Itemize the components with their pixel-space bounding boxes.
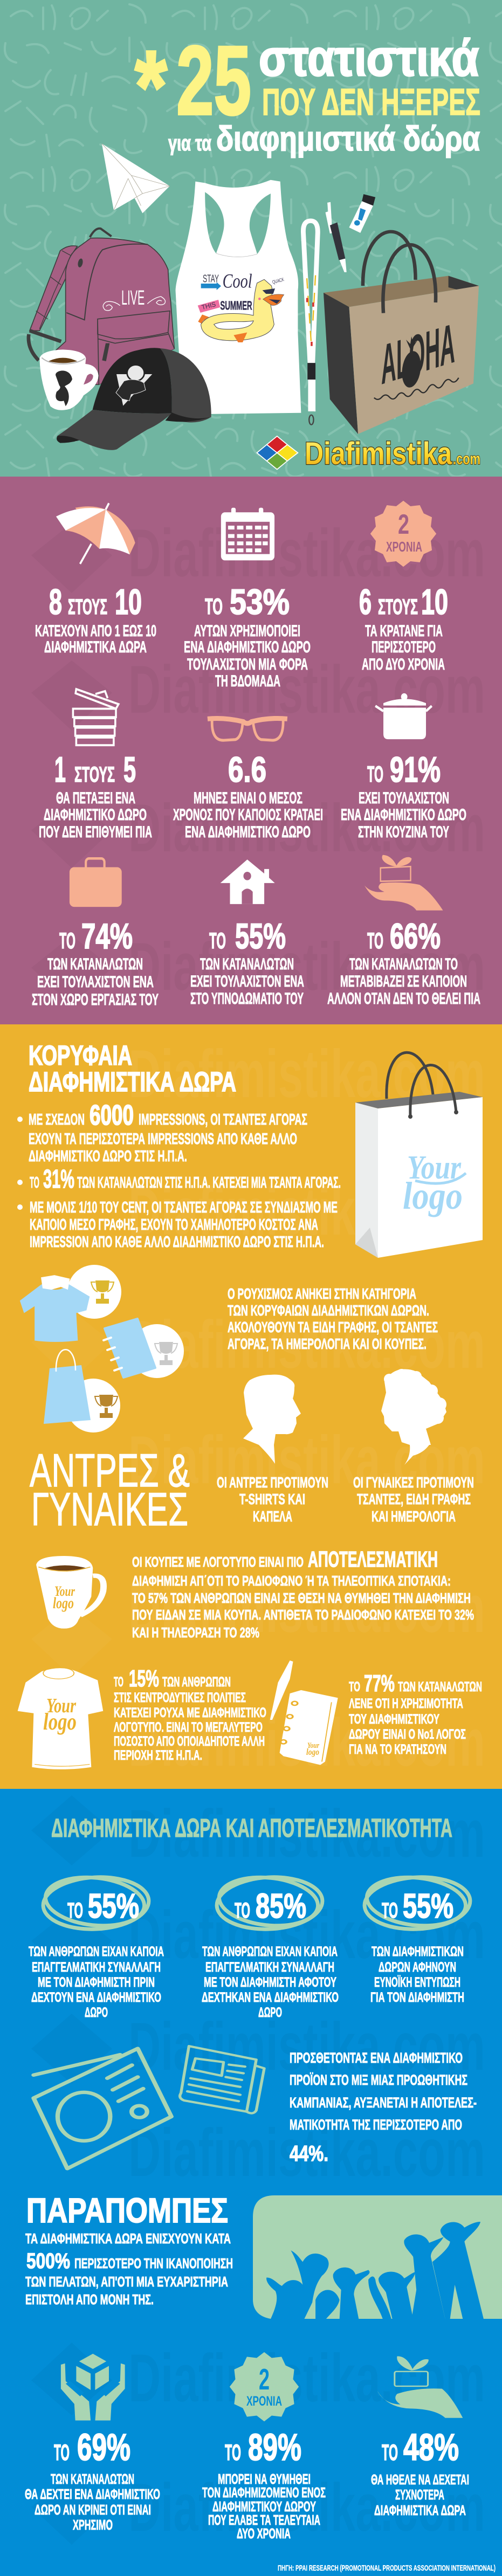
stat: 8 of 10: 8: [49, 582, 62, 622]
stat: 48 percent: 48%: [403, 2426, 459, 2468]
stat: 66 percent: [327, 916, 480, 1008]
text: 77 percent: ΤΟ: [349, 1679, 360, 1695]
stat: 8 of 10: ΣΤΟΥΣ: [68, 595, 107, 619]
icon: duck print on tank top: Cool: [223, 270, 252, 292]
icon: white mug with logo: logo: [53, 1594, 74, 1612]
stat: 55 percent before: ΤΟ: [67, 1899, 83, 1923]
text: 15 percent: ΠΕΡΙΟΧΗ ΣΤΙΣ Η.Π.Α.: [114, 1748, 202, 1763]
stat: 85 percent after: ΜΕ ΤΟΝ ΔΙΑΦΗΜΙΣΤΗ ΑΦΟΤΟΥ: [204, 1975, 336, 1990]
stat: 55 percent: [190, 916, 304, 1008]
stat: 8 of 10: 10: [115, 582, 142, 622]
text: 77 percent: [349, 1670, 482, 1757]
stat: 55 percent: ΤΟ: [209, 928, 226, 953]
title: για τα: [168, 132, 211, 155]
stat: 85 percent after: ΔΕΧΤΗΚΑΝ ΕΝΑ ΔΙΑΦΗΜΙΣΤΙΚΟ: [202, 1990, 339, 2005]
icon: coffee mug: [39, 349, 99, 410]
stat: 1 of 5: ΘΑ ΠΕΤΑΞΕΙ ΕΝΑ: [56, 789, 135, 807]
stat: 53 percent: ΤΗ ΒΔΟΜΑΔΑ: [215, 672, 280, 690]
stat: 69 percent: ΤΩΝ ΚΑΤΑΝΑΛΩΤΩΝ: [51, 2471, 134, 2487]
stat: 85 percent after: ΕΠΑΓΓΕΛΜΑΤΙΚΗ ΣΥΝΑΛΛΑΓΗ: [205, 1960, 334, 1975]
heading: men and women: ΓΥΝΑΙΚΕΣ: [31, 1484, 188, 1535]
stat: 74 percent: ΤΟ: [59, 928, 75, 953]
text: 15 percent: 15%: [129, 1665, 159, 1692]
stat: 89 percent: ΤΟΝ ΔΙΑΦΗΜΙΖΟΜΕΝΟ ΕΝΟΣ: [202, 2484, 326, 2501]
text: referrals paragraph: [25, 2230, 233, 2308]
icon: hand with gift: [377, 2356, 463, 2418]
stat: 53 percent: [184, 582, 311, 690]
text: bullet list: ΕΧΟΥΝ ΤΑ ΠΕΡΙΣΣΟΤΕΡΑ IMPRESSIONS ΑΠΟ ΚΑΘΕ ΑΛΛΟ: [29, 1131, 297, 1148]
stat: 55 percent: ΕΧΕΙ ΤΟΥΛΑΧΙΣΤΟΝ ΕΝΑ: [190, 973, 304, 990]
stat: 6.6 months: ΜΗΝΕΣ ΕΙΝΑΙ Ο ΜΕΣΟΣ: [194, 789, 302, 807]
text: clothing category: [228, 1285, 438, 1352]
icon: duck print on tank top: STAY: [203, 272, 219, 285]
icon: shirt with gold trophy: [20, 1265, 121, 1342]
stat: 6.6 months: [173, 749, 323, 841]
icon: 2 years badge: [230, 2352, 299, 2421]
stat: 85 percent after: 85%: [256, 1886, 306, 1925]
text: referrals paragraph: ΤΑ ΔΙΑΦΗΜΙΣΤΙΚΑ ΔΩΡΑ ΕΝΙΣΧΥΟΥΝ ΚΑΤΑ: [25, 2230, 231, 2247]
stat: 53 percent: ΤΟ: [205, 594, 223, 619]
stat: 85 percent after: ΔΩΡΟ: [258, 2005, 282, 2020]
title: 25: [176, 25, 251, 135]
text: men prefer: T-SHIRTS ΚΑΙ: [239, 1491, 305, 1507]
heading: top promotional gifts: ΚΟΡΥΦΑΙΑ: [29, 1040, 132, 1071]
stat: 55 percent before: 55%: [88, 1886, 139, 1925]
text: 15 percent: [114, 1665, 266, 1763]
stat: 6 of 10: ΣΤΟΥΣ: [378, 595, 418, 619]
stat: 55 percent before: ΜΕ ΤΟΝ ΔΙΑΦΗΜΙΣΤΗ ΠΡΙΝ: [38, 1975, 155, 1990]
stat: 6.6 months: 6.6: [228, 749, 266, 789]
icon: duck print on tank top: SUMMER: [220, 298, 252, 312]
stat: 1 of 5: 5: [123, 749, 136, 789]
icon: calendar: [221, 508, 274, 560]
icon: pen and notebook: logo: [306, 1747, 319, 1757]
logo: Diafimistika.com: Diafimistika: [305, 436, 452, 471]
icon: white shopping bag with your logo: Your: [407, 1149, 462, 1186]
text: referrals paragraph: ΕΠΙΣΤΟΛΗ ΑΠΟ ΜΟΝΗ ΤΗΣ.: [25, 2291, 154, 2308]
icon: paper plane: [102, 143, 170, 213]
text: women prefer: [353, 1474, 474, 1525]
stat: 69 percent: ΘΑ ΔΕΧΤΕΙ ΕΝΑ ΔΙΑΦΗΜΙΣΤΙΚΟ: [25, 2486, 160, 2502]
stat: 74 percent: ΣΤΟΝ ΧΩΡΟ ΕΡΓΑΣΙΑΣ ΤΟΥ: [32, 991, 159, 1009]
stat: 48 percent: ΣΥΧΝΟΤΕΡΑ: [395, 2487, 444, 2503]
stat: 1 of 5: ΣΤΟΥΣ: [74, 763, 115, 787]
icon: house: [221, 859, 275, 904]
icon: duck print on tank top: [198, 270, 285, 342]
stat: 6 of 10: ΤΑ ΚΡΑΤΑΝΕ ΓΙΑ: [365, 622, 443, 640]
stat: 69 percent: [25, 2426, 160, 2533]
icon: racerback tank top: [176, 180, 301, 415]
stat: 53 percent: ΤΟΥΛΑΧΙΣΤΟΝ ΜΙΑ ΦΟΡΑ: [187, 656, 308, 673]
stat: 74 percent: ΤΩΝ ΚΑΤΑΝΑΛΩΤΩΝ: [47, 955, 143, 973]
stat: 55 percent before: ΔΕΧΤΟΥΝ ΕΝΑ ΔΙΑΦΗΜΙΣΤΙΚΟ: [31, 1990, 161, 2005]
stat: 55 percent impression: ΤΟ: [382, 1899, 398, 1923]
text: bullet list: ΤΟ: [30, 1174, 39, 1191]
text: men prefer: [217, 1474, 328, 1525]
stat: 6.6 months: ΕΝΑ ΔΙΑΦΗΜΙΣΤΙΚΟ ΔΩΡΟ: [185, 823, 311, 841]
panel: hero header: [0, 0, 502, 477]
icon: stacked bin: [73, 689, 119, 745]
stat: 53 percent: 53%: [230, 582, 290, 622]
stat: 8 of 10: [35, 582, 156, 656]
heading: men and women: ΑΝΤΡΕΣ &: [30, 1445, 190, 1497]
stat: 55 percent: ΤΩΝ ΚΑΤΑΝΑΛΩΤΩΝ: [200, 955, 294, 973]
stat: 89 percent: ΠΟΥ ΕΛΑΒΕ ΤΑ ΤΕΛΕΥΤΑΙΑ: [208, 2512, 320, 2528]
stat: 69 percent: ΧΡΗΣΙΜΟ: [73, 2517, 113, 2533]
heading: referrals: ΠΑΡΑΠΟΜΠΕΣ: [26, 2191, 228, 2230]
icon: 2 years badge: ΧΡΟΝΙΑ: [246, 2394, 282, 2409]
stat: 6 of 10: [359, 582, 448, 673]
stat: 85 percent after: ΤΟ: [235, 1899, 250, 1923]
stat: 6 of 10: ΑΠΟ ΔΥΟ ΧΡΟΝΙΑ: [362, 656, 445, 673]
icon: lanyard: [303, 221, 318, 425]
stat: 91 percent: 91%: [390, 749, 441, 789]
stat: 91 percent: ΤΟ: [367, 761, 383, 787]
stat: 89 percent: ΤΟ: [225, 2440, 241, 2465]
text: adding a promotional product: 44%.: [290, 2141, 328, 2166]
heading: top promotional gifts: ΔΙΑΦΗΜΙΣΤΙΚΑ ΔΩΡΑ: [29, 1066, 236, 1097]
icon: umbrella: [56, 503, 135, 564]
icon: female silhouette: [381, 1369, 446, 1465]
stat: 74 percent: [32, 916, 159, 1009]
stat: 55 percent before: ΤΩΝ ΑΝΘΡΩΠΩΝ ΕΙΧΑΝ ΚΑΠΟΙΑ: [29, 1944, 164, 1959]
text: 15 percent: ΠΟΣΟΣΤΟ ΑΠΟ ΟΠΟΙΑΔΗΠΟΤΕ ΑΛΛΗ: [114, 1734, 265, 1749]
stat: 91 percent: [341, 749, 466, 841]
icon: cooking pot: [375, 693, 432, 739]
text: 15 percent: ΤΟ: [114, 1675, 123, 1690]
stat: 6.6 months: ΧΡΟΝΟΣ ΠΟΥ ΚΑΠΟΙΟΣ ΚΡΑΤΑΕΙ: [173, 806, 323, 824]
panel: blue effectiveness and referrals: [0, 1789, 502, 2576]
stat: 1 of 5: 1: [54, 749, 66, 789]
text: adding a promotional product: [290, 2050, 477, 2166]
stat: 55 percent before: ΔΩΡΟ: [85, 2005, 108, 2020]
text: mugs effectiveness: ΚΑΙ Η ΤΗΛΕΟΡΑΣΗ ΤΟ 28%: [132, 1624, 259, 1641]
stat: 69 percent: ΔΩΡΟ ΑΝ ΚΡΙΝΕΙ ΟΤΙ ΕΙΝΑΙ: [35, 2502, 151, 2518]
icon: male silhouette: [243, 1375, 301, 1464]
icon: 2 years badge: ΧΡΟΝΙΑ: [386, 539, 422, 555]
stat: 89 percent: ΔΥΟ ΧΡΟΝΙΑ: [237, 2525, 291, 2541]
stat: 55 percent before: [29, 1873, 164, 2020]
icon: white shopping bag with your logo: [355, 1052, 483, 1258]
text: women prefer: ΚΑΙ ΗΜΕΡΟΛΟΓΙΑ: [372, 1508, 456, 1525]
panel: thumbs up illustration: [253, 2195, 502, 2319]
stat: 55 percent: ΣΤΟ ΥΠΝΟΔΩΜΑΤΙΟ ΤΟΥ: [190, 990, 304, 1008]
icon: bag with bronze trophy: [44, 1349, 120, 1432]
text: bullet list: [17, 1100, 341, 1251]
stat: 48 percent: [371, 2426, 469, 2518]
stat: 89 percent: [202, 2426, 326, 2541]
text: 15 percent: ΛΟΓΟΤΥΠΟ. ΕΙΝΑΙ ΤΟ ΜΕΓΑΛΥΤΕΡΟ: [114, 1720, 263, 1735]
stat: 48 percent: ΤΟ: [382, 2440, 398, 2465]
icon: duck print on tank top: THIS: [201, 300, 217, 311]
stat: 55 percent: 55%: [235, 916, 286, 956]
text: bullet list: 31%: [43, 1165, 74, 1194]
icon: hands holding box: [61, 2354, 125, 2421]
text: 15 percent: ΣΤΙΣ ΚΕΝΤΡΟΔΥΤΙΚΕΣ ΠΟΛΙΤΙΕΣ: [114, 1690, 246, 1705]
icon: white t-shirt with logo: [18, 1668, 103, 1769]
logo: Diafimistika.com: .com: [453, 450, 480, 468]
stat: 53 percent: ΕΝΑ ΔΙΑΦΗΜΙΣΤΙΚΟ ΔΩΡΟ: [184, 638, 311, 656]
text: 77 percent: ΤΟΥ ΔΙΑΦΗΜΙΣΤΙΚΟΥ: [349, 1712, 439, 1727]
icon: notebook with silver trophy: [104, 1319, 184, 1378]
stat: 55 percent impression: 55%: [403, 1886, 453, 1925]
text: bullet list: IMPRESSIONS, ΟΙ ΤΣΑΝΤΕΣ ΑΓΟΡΑΣ: [139, 1111, 307, 1128]
icon: white t-shirt with logo: logo: [43, 1709, 77, 1735]
stat: 85 percent after: [202, 1873, 339, 2020]
text: 77 percent: ΓΙΑ ΝΑ ΤΟ ΚΡΑΤΗΣΟΥΝ: [349, 1742, 446, 1757]
icon: lighter: [349, 194, 375, 233]
icon: pen and notebook: [270, 1661, 338, 1765]
icon: duck print on tank top: QUACK: [272, 277, 285, 285]
stat: 69 percent: ΤΟ: [54, 2440, 70, 2465]
stat: 69 percent: 69%: [77, 2426, 130, 2468]
icon: backpack: [29, 229, 174, 384]
stat: 8 of 10: ΚΑΤΕΧΟΥΝ ΑΠΟ 1 ΕΩΣ 10: [35, 622, 156, 640]
text: referrals paragraph: ΠΕΡΙΣΣΟΤΕΡΟ ΤΗΝ ΙΚΑΝΟΠΟΙΗΣΗ: [74, 2255, 233, 2271]
stat: 55 percent impression: [363, 1873, 471, 2005]
text: men prefer: ΟΙ ΑΝΤΡΕΣ ΠΡΟΤΙΜΟΥΝ: [217, 1474, 328, 1491]
text: bullet list: 6000: [90, 1100, 134, 1131]
stat: 1 of 5: [39, 749, 152, 841]
stat: 55 percent impression: ΔΩΡΩΝ ΑΦΗΝΟΥΝ: [379, 1960, 456, 1975]
text: bullet list: ΔΙΑΦΗΜΙΣΤΙΚΟ ΔΩΡΟ ΣΤΙΣ Η.Π.Α.: [29, 1148, 187, 1165]
icon: 2 years badge: 2: [398, 509, 409, 540]
stat: 55 percent before: ΕΠΑΓΓΕΛΜΑΤΙΚΗ ΣΥΝΑΛΛΑΓΗ: [32, 1960, 161, 1975]
stat: 1 of 5: ΠΟΥ ΔΕΝ ΕΠΙΘΥΜΕΙ ΠΙΑ: [39, 823, 152, 841]
icon: baseball cap: [57, 348, 211, 450]
icon: briefcase: [70, 858, 122, 907]
icon: pen: [326, 202, 347, 272]
text: referrals paragraph: ΤΩΝ ΠΕΛΑΤΩΝ, ΑΠ'ΟΤΙ ΜΙΑ ΕΥΧΑΡΙΣΤΗΡΙΑ: [25, 2274, 228, 2290]
icon: radio: [33, 2049, 171, 2168]
icon: white mug with logo: [36, 1556, 104, 1629]
icon: glasses: [208, 718, 287, 740]
text: mugs effectiveness: ΟΙ ΚΟΥΠΕΣ ΜΕ ΛΟΓΟΤΥΠΟ ΕΙΝΑΙ ΠΙΟ: [132, 1554, 304, 1570]
text: mugs effectiveness: [132, 1547, 474, 1641]
panel: yellow top promotional gifts: [0, 1024, 502, 1789]
text: referrals paragraph: 500%: [26, 2249, 70, 2273]
text: 15 percent: ΤΩΝ ΑΝΘΡΩΠΩΝ: [162, 1675, 231, 1690]
title: [135, 25, 480, 158]
icon: white shopping bag with your logo: logo: [403, 1174, 463, 1217]
stat: 66 percent: 66%: [390, 916, 441, 956]
stat: 66 percent: ΤΟ: [367, 928, 383, 953]
title: *: [135, 30, 167, 144]
stat: 1 of 5: ΔΙΑΦΗΜΙΣΤΙΚΟ ΔΩΡΟ: [44, 806, 147, 824]
icon: newspaper: [180, 2046, 264, 2113]
icon: kraft paper bag: [324, 232, 479, 434]
stat: 85 percent after: ΤΩΝ ΑΝΘΡΩΠΩΝ ΕΙΧΑΝ ΚΑΠΟΙΑ: [202, 1944, 338, 1959]
stat: 89 percent: ΜΠΟΡΕΙ ΝΑ ΘΥΜΗΘΕΙ: [218, 2471, 311, 2487]
text: 15 percent: ΚΑΤΕΧΕΙ ΡΟΥΧΑ ΜΕ ΔΙΑΦΗΜΙΣΤΙΚΟ: [114, 1705, 266, 1720]
stat: 6 of 10: ΠΕΡΙΣΣΟΤΕΡΟ: [372, 638, 436, 656]
stat: 6 of 10: 10: [421, 582, 448, 622]
icon: 2 years badge: 2: [259, 2363, 270, 2396]
stat: 53 percent: ΑΥΤΩΝ ΧΡΗΣΙΜΟΠΟΙΕΙ: [194, 622, 300, 640]
icon: 2 years badge: [370, 501, 436, 567]
icon: white mug with logo: Your: [54, 1583, 75, 1599]
heading: top promotional gifts: [29, 1040, 236, 1097]
stat: 74 percent: 74%: [81, 916, 133, 956]
text: bullet list: ΜΕ ΣΧΕΔΟΝ: [29, 1111, 85, 1128]
icon: hand with gift: [365, 855, 443, 911]
stat: 74 percent: ΕΧΕΙ ΤΟΥΛΑΧΙΣΤΟΝ ΕΝΑ: [37, 973, 154, 991]
text: 77 percent: 77%: [364, 1670, 395, 1697]
stat: 89 percent: ΔΙΑΦΗΜΙΣΤΙΚΟΥ ΔΩΡΟΥ: [212, 2498, 316, 2515]
icon: white t-shirt with logo: Your: [46, 1695, 77, 1717]
stat: 6 of 10: 6: [359, 582, 372, 622]
stat: 89 percent: 89%: [248, 2426, 301, 2468]
text: men prefer: ΚΑΠΕΛΑ: [253, 1508, 292, 1525]
stat: 8 of 10: ΔΙΑΦΗΜΙΣΤΙΚΑ ΔΩΡΑ: [44, 638, 147, 656]
heading: men and women: [30, 1445, 190, 1535]
panel: purple statistics: [0, 477, 502, 1024]
icon: pen and notebook: Your: [307, 1741, 319, 1750]
icon: backpack: LIVE: [121, 286, 145, 309]
